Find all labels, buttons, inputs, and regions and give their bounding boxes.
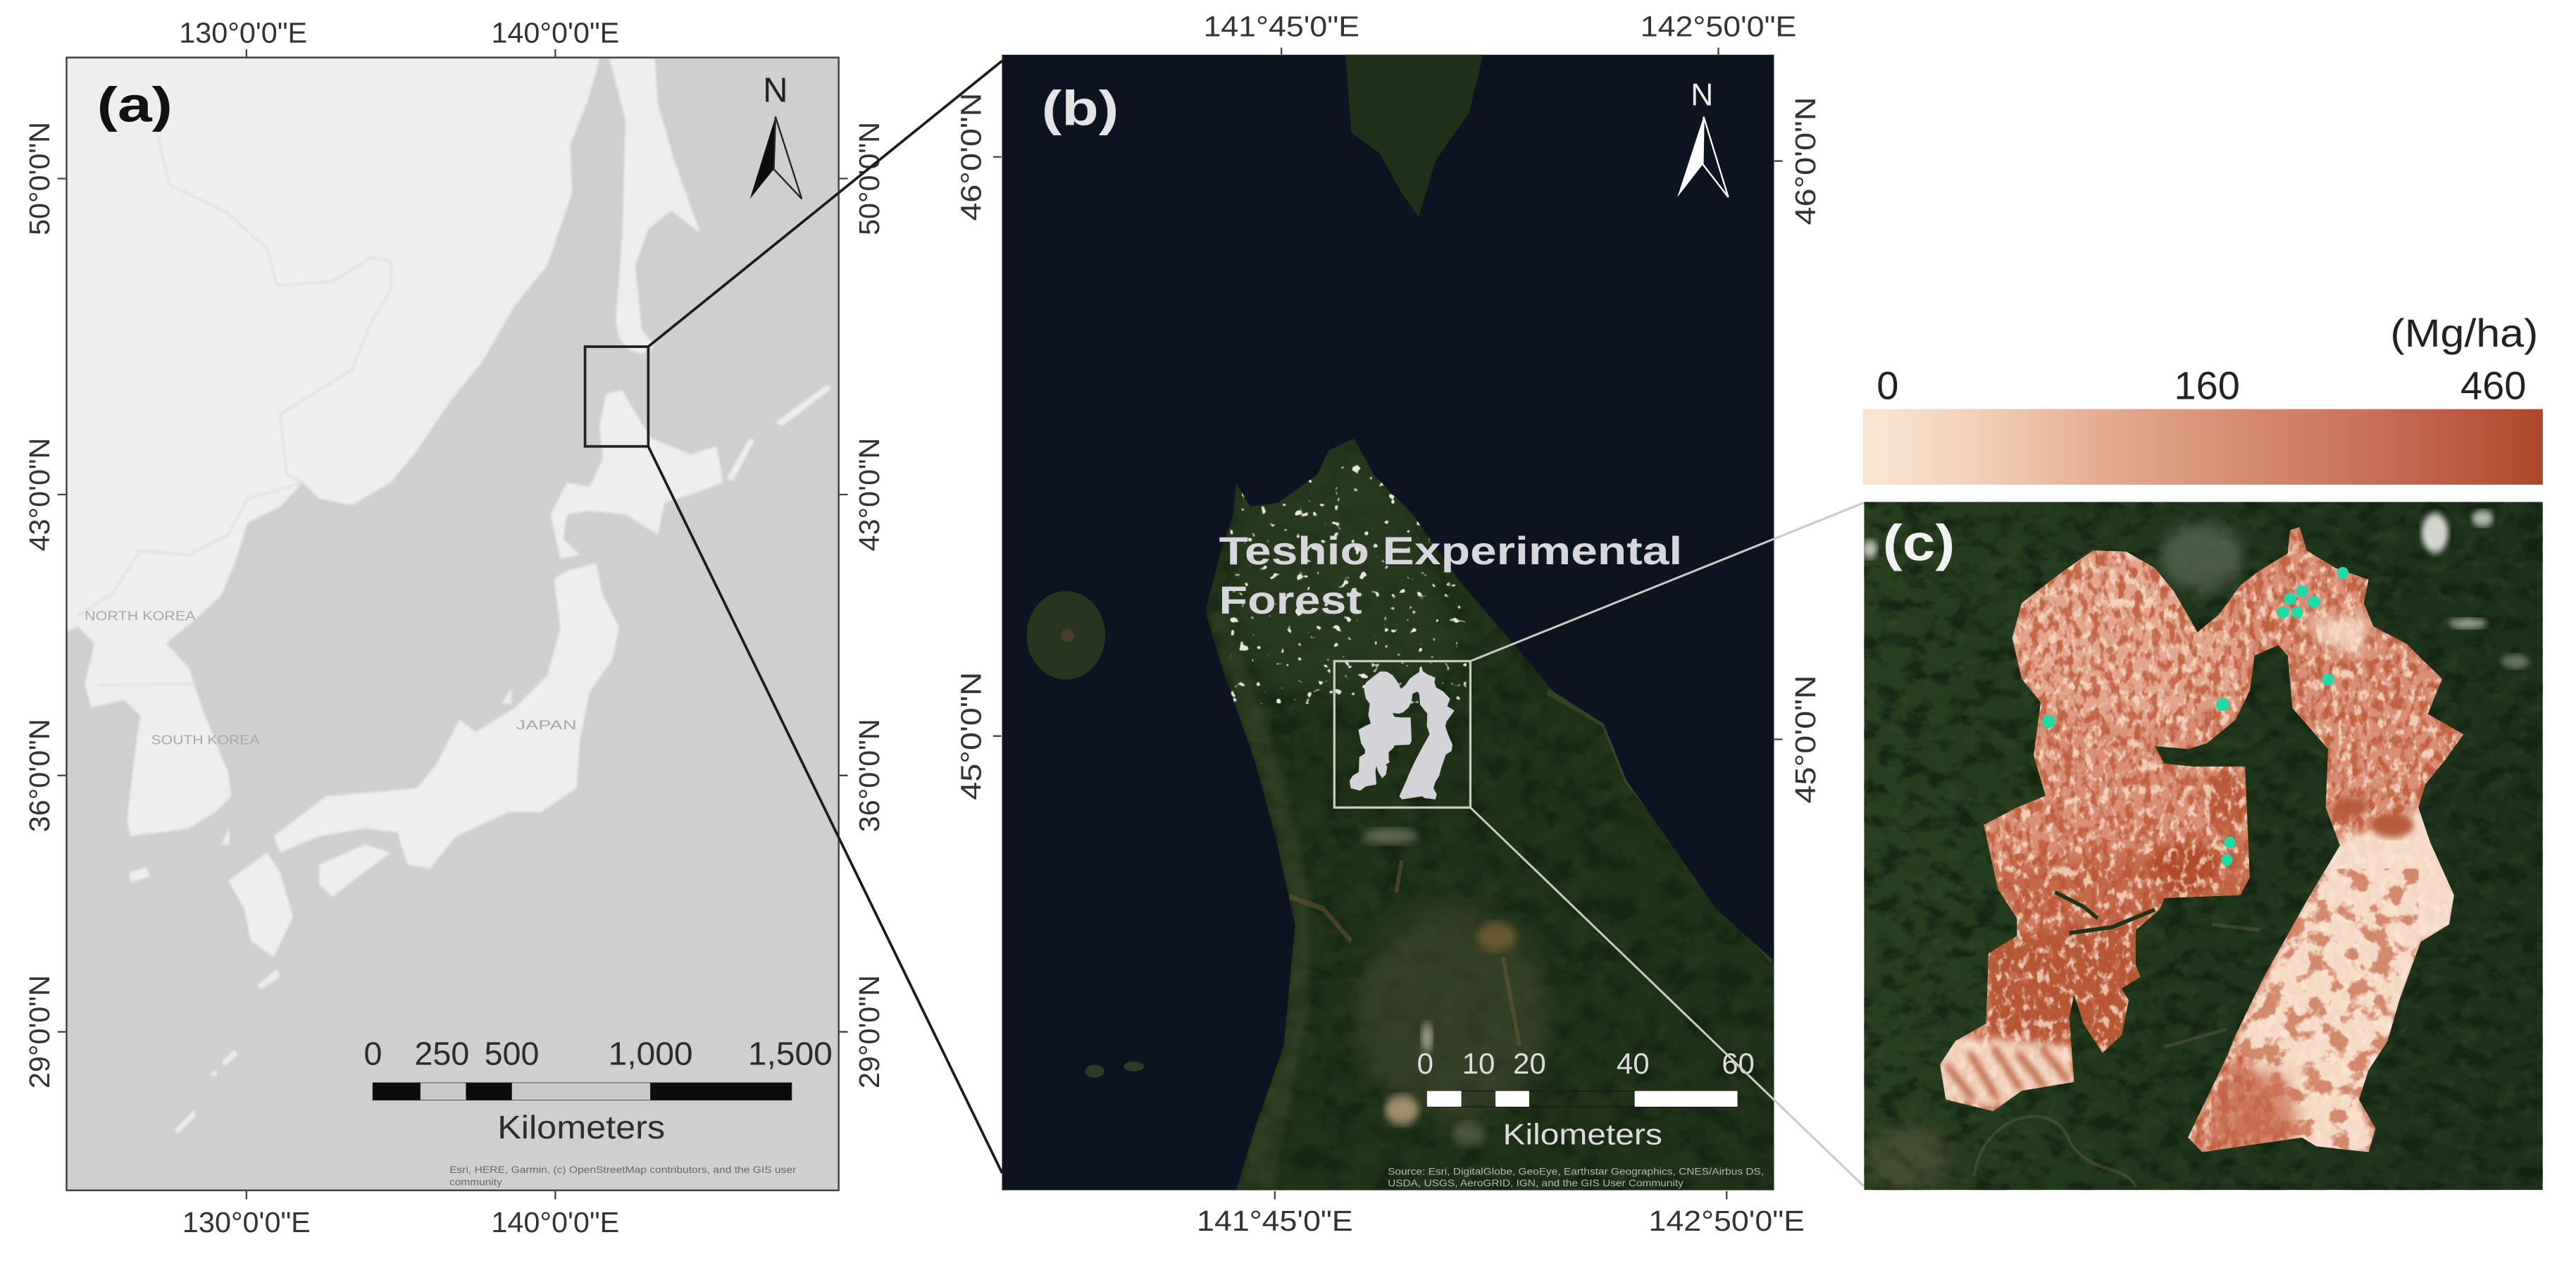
- connector lines from panel b to panel c: [1470, 503, 1864, 1186]
- legend: biomass color bar: 460: [2460, 364, 2526, 408]
- scale bar a: 0: [363, 1035, 382, 1071]
- north arrow a: N: [763, 72, 788, 110]
- map a: sea and land: [66, 58, 838, 1191]
- attribution a: [449, 1164, 797, 1188]
- panel a coordinate labels: 130°0'0"E: [179, 17, 307, 49]
- dark channels in forest: [2055, 892, 2155, 933]
- attribution b: Source: Esri, DigitalGlobe, GeoEye, Earthstar Geographics, CNES/Airbus DS,: [1388, 1166, 1764, 1177]
- scale bar b: 0: [1417, 1047, 1433, 1080]
- panel a coordinate labels: 50°0'0"N: [853, 122, 885, 235]
- legend: biomass color bar: 160: [2174, 364, 2240, 408]
- scale bar a: 1,500: [748, 1035, 833, 1071]
- satellite image: [1002, 55, 1778, 1198]
- forest name label: Forest: [1219, 578, 1362, 622]
- panel a coordinate labels: 29°0'0"N: [853, 975, 885, 1088]
- forest silhouette on panel b: [1350, 666, 1455, 800]
- panel b letter: (b): [1042, 80, 1119, 135]
- panel a letter: (a): [97, 77, 173, 132]
- attribution b: USDA, USGS, AeroGRID, IGN, and the GIS User Community: [1388, 1177, 1684, 1188]
- panel a coordinate labels: 43°0'0"N: [853, 438, 885, 551]
- panel a border: [66, 58, 839, 1191]
- panel c: biomass map: [1862, 311, 2543, 1193]
- country names: [85, 608, 577, 747]
- panel a coordinate labels: 36°0'0"N: [23, 719, 56, 832]
- panel b coordinate labels: [954, 10, 1822, 1237]
- panel b ticks: [993, 48, 1783, 1200]
- legend: biomass color bar: 0: [1877, 364, 1898, 408]
- forest name label: [1219, 528, 1682, 622]
- scale bar b: 20: [1513, 1047, 1546, 1080]
- scale bar b: [1417, 1047, 1755, 1150]
- locator box on panel b: [1334, 661, 1470, 807]
- locator box on panel a: [585, 347, 648, 447]
- panel a coordinate labels: 130°0'0"E: [182, 1206, 311, 1238]
- panel a coordinate labels: 36°0'0"N: [853, 719, 885, 832]
- forest fill with biomass mottling: [1936, 521, 2468, 1158]
- panel a coordinate labels: 50°0'0"N: [23, 122, 56, 235]
- panel c letter: (c): [1883, 515, 1955, 571]
- scale bar b: 60: [1722, 1047, 1755, 1080]
- country names: SOUTH KOREA: [151, 733, 260, 747]
- scale bar b: 10: [1462, 1047, 1495, 1080]
- panel b coordinate labels: 46°0'0"N: [1789, 97, 1822, 225]
- panel b coordinate labels: 45°0'0"N: [954, 672, 987, 800]
- scale bar a: 250: [414, 1035, 469, 1071]
- panel a coordinate labels: [23, 17, 885, 1238]
- panel a ticks: [58, 49, 847, 1200]
- panel b coordinate labels: 141°45'0"E: [1197, 1205, 1353, 1237]
- panel a coordinate labels: 43°0'0"N: [23, 438, 56, 551]
- scale bar b: 40: [1617, 1047, 1650, 1080]
- legend: biomass color bar: [1862, 311, 2543, 485]
- panel b coordinate labels: 142°50'0"E: [1641, 10, 1796, 42]
- panel b: satellite map: [954, 10, 1822, 1237]
- north arrow b: N: [1691, 77, 1713, 112]
- scale bar a: 1,000: [609, 1035, 693, 1071]
- north arrow a: [750, 72, 802, 199]
- connector lines from panel a to panel b: [648, 61, 1002, 1173]
- panel b coordinate labels: 141°45'0"E: [1203, 10, 1359, 42]
- panel b coordinate labels: 142°50'0"E: [1648, 1205, 1805, 1237]
- scale bar a: [363, 1035, 833, 1145]
- panel a coordinate labels: 140°0'0"E: [491, 17, 619, 49]
- panel a coordinate labels: 140°0'0"E: [491, 1206, 619, 1238]
- scale bar a: Kilometers: [497, 1109, 665, 1145]
- north arrow b: [1677, 77, 1729, 197]
- country names: JAPAN: [516, 718, 577, 733]
- legend: biomass color bar: (Mg/ha): [2390, 311, 2538, 355]
- attribution b: [1388, 1166, 1764, 1188]
- scale bar b: Kilometers: [1503, 1117, 1662, 1150]
- sample plots: [2042, 567, 2348, 866]
- attribution a: Esri, HERE, Garmin, (c) OpenStreetMap contributors, and the GIS user: [449, 1164, 797, 1175]
- attribution a: community: [449, 1176, 502, 1188]
- scale bar a: 500: [485, 1035, 539, 1071]
- panel a: regional map: [23, 17, 885, 1238]
- biomass raster: [1862, 502, 2543, 1193]
- panel b coordinate labels: 45°0'0"N: [1789, 676, 1822, 803]
- panel b coordinate labels: 46°0'0"N: [954, 93, 987, 221]
- panel a coordinate labels: 29°0'0"N: [23, 975, 56, 1088]
- country names: NORTH KOREA: [85, 608, 196, 623]
- forest name label: Teshio Experimental: [1219, 528, 1682, 573]
